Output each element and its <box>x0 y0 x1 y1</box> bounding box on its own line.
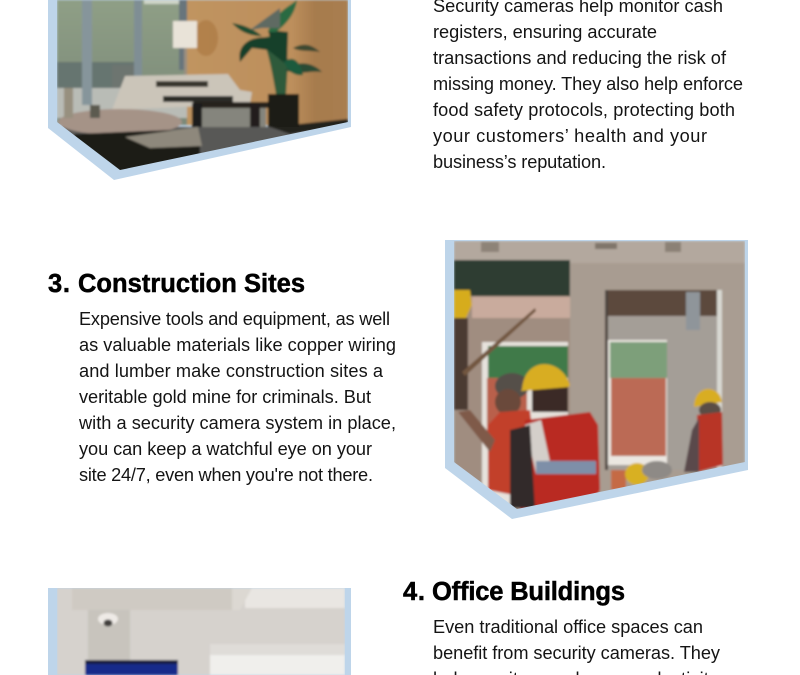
text block: construction sites body: Expensive tools and equipment, as well <box>79 309 390 329</box>
text block: office buildings body <box>433 617 721 675</box>
text block: section 2 body: your customers’ health and your <box>433 126 707 146</box>
text block: construction sites body: veritable gold mine for criminals. But <box>79 387 371 407</box>
text block: section 2 body: food safety protocols, protecting both <box>433 100 735 120</box>
text block: section 2 body: transactions and reducing the risk of <box>433 48 727 68</box>
text block: construction sites body: site 24/7, even when you're not there. <box>79 465 373 485</box>
text block: office buildings body: Even traditional office spaces can <box>433 617 703 637</box>
text block: construction sites body: as valuable materials like copper wiring <box>79 335 396 355</box>
heading: 4. Office Buildings: 4. <box>403 578 425 606</box>
image: office interior with security camera and blue frame <box>48 588 351 675</box>
text block: section 2 body: business’s reputation. <box>433 152 606 172</box>
text block: section 2 body <box>433 0 743 172</box>
text block: construction sites body <box>78 309 396 485</box>
text block: construction sites body: you can keep a watchful eye on your <box>79 439 372 459</box>
heading: 3. Construction Sites: Construction Sites <box>78 270 305 298</box>
heading: 3. Construction Sites: 3. <box>48 270 70 298</box>
text block: section 2 body: missing money. They also help enforce <box>433 74 743 94</box>
text block: section 2 body: registers, ensuring accurate <box>433 22 657 42</box>
text block: office buildings body: benefit from security cameras. They <box>433 643 721 663</box>
heading: 4. Office Buildings: Office Buildings <box>432 578 625 606</box>
image: construction workers with blue frame <box>445 240 748 519</box>
image: restaurant interior with blue frame <box>48 0 351 187</box>
text block: construction sites body: with a security camera system in place, <box>78 413 396 433</box>
text block: construction sites body: and lumber make construction sites a <box>79 361 384 381</box>
